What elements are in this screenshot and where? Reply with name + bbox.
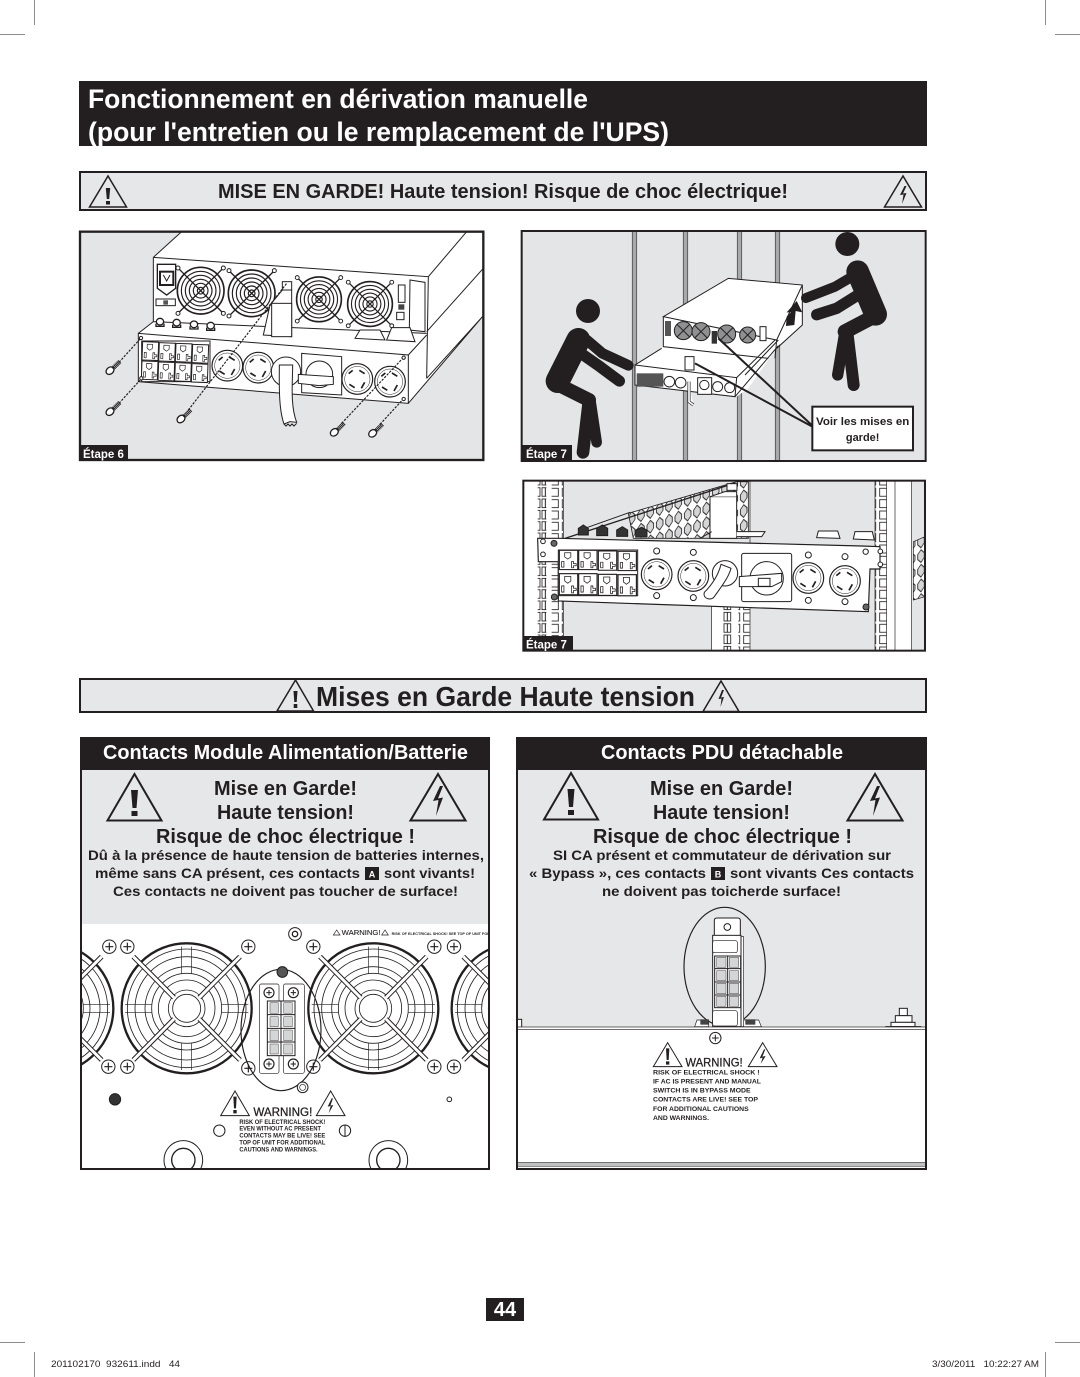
label: Étape 7 second xyxy=(523,636,573,652)
panel: Étape 7 PDU in rack xyxy=(523,481,925,651)
page number: 44 xyxy=(494,1299,517,1321)
warning label: WARNING! xyxy=(253,1105,312,1119)
knobs xyxy=(578,525,647,537)
warning text: MISE EN GARDE! Haute tension! Risque de choc électrique! xyxy=(218,181,788,203)
receptacles xyxy=(141,341,210,383)
receptacles xyxy=(558,550,638,596)
warning heading: Haute tension! xyxy=(217,802,354,824)
UPS unit xyxy=(635,278,802,405)
cable xyxy=(704,561,738,599)
warning body text xyxy=(529,847,914,899)
mounting holes xyxy=(109,928,452,1179)
warning body text: sont vivants! xyxy=(384,865,475,881)
callout box: Voir les mises en xyxy=(816,416,910,428)
icon: lightning triangle xyxy=(703,681,739,712)
warning label: WARNING! xyxy=(685,1056,743,1070)
warning label: RISK OF ELECTRICAL SHOCK ! xyxy=(653,1070,760,1076)
header bar: Contacts PDU détachable xyxy=(601,742,843,764)
warning heading: Mise en Garde! xyxy=(650,778,793,800)
connectors and card xyxy=(355,280,425,342)
left person xyxy=(558,299,628,452)
twist-lock outlets xyxy=(641,548,860,605)
rear grille xyxy=(565,482,925,600)
callout box: garde! xyxy=(846,432,879,444)
rack rails xyxy=(538,481,912,651)
warning body text: même sans CA présent, ces contacts xyxy=(95,865,360,881)
warning label: SWITCH IS IN BYPASS MODE xyxy=(653,1089,751,1095)
heading text: Mises en Garde Haute tension xyxy=(316,681,695,712)
warning body text: Dû à la présence de haute tension de batteries internes, xyxy=(88,847,484,863)
warning label: TOP OF UNIT FOR ADDITIONAL xyxy=(239,1140,326,1146)
fans xyxy=(0,943,582,1073)
footer: file name: 201102170 932611.indd 44 xyxy=(51,1359,180,1370)
icon: power inlet xyxy=(156,264,176,306)
title banner: (pour l'entretien ou le remplacement de l'UPS) xyxy=(88,117,669,147)
circled contact block xyxy=(684,907,765,1027)
top warning strip xyxy=(332,930,488,936)
warning body text: Ces contacts ne doivent pas toucher de surface! xyxy=(113,883,458,899)
callout arrows xyxy=(695,338,812,427)
title banner: Fonctionnement en dérivation manuelle xyxy=(88,84,588,114)
warning label: FOR ADDITIONAL CAUTIONS xyxy=(653,1107,749,1113)
warning body text: sont vivants Ces contacts xyxy=(730,865,914,881)
warning body text: B xyxy=(715,870,722,880)
diagram: PDU contacts and warning label xyxy=(517,907,925,1166)
warning label: AND WARNINGS. xyxy=(653,1116,709,1122)
warning heading: Risque de choc électrique ! xyxy=(593,826,852,848)
callout box xyxy=(812,407,913,450)
warning body text: « Bypass », ces contacts xyxy=(529,865,706,881)
footer: date: 3/30/2011 10:22:27 AM xyxy=(932,1359,1039,1370)
panel: Contacts PDU détachable xyxy=(516,737,927,1169)
warning label: CONTACTS ARE LIVE! SEE TOP xyxy=(653,1098,758,1104)
header bar: Contacts Module Alimentation/Batterie xyxy=(103,742,468,764)
fans xyxy=(176,266,394,328)
icon: exclamation triangle xyxy=(277,680,314,711)
warning label: EVEN WITHOUT AC PRESENT xyxy=(239,1126,321,1132)
top warning strip: WARNING! xyxy=(342,928,381,937)
twist-lock outlets xyxy=(212,350,405,397)
top warning strip: RISK OF ELECTRICAL SHOCK! SEE TOP OF UNIT FOR xyxy=(392,932,490,936)
section heading: Mises en Garde Haute tension xyxy=(80,679,926,712)
icon: exclamation triangle xyxy=(90,176,126,207)
warning bar xyxy=(80,172,926,210)
warning body text: ne doivent pas toicherde surface! xyxy=(602,883,841,899)
label: Étape 7: Étape 7 xyxy=(526,448,567,461)
label: Étape 6 xyxy=(80,445,128,461)
warning heading xyxy=(593,778,852,848)
page number xyxy=(486,1298,524,1321)
flaps xyxy=(817,531,874,540)
bypass switch xyxy=(739,553,792,602)
warning label: CAUTIONS AND WARNINGS. xyxy=(239,1147,318,1153)
knobs xyxy=(156,318,215,330)
screw xyxy=(710,1032,721,1044)
header bar xyxy=(516,737,927,769)
circled contact block xyxy=(241,967,321,1093)
warning label xyxy=(653,1043,777,1122)
screws xyxy=(105,283,405,439)
label: Étape 6: Étape 6 xyxy=(83,448,124,461)
icon: lightning triangle xyxy=(884,176,922,207)
diagram: rear panel with fans and contacts xyxy=(82,927,488,1168)
bracket xyxy=(263,282,292,337)
rack rails xyxy=(632,231,780,461)
icon: lightning triangle xyxy=(410,774,466,820)
PDU faceplate xyxy=(538,538,883,612)
warning heading: Risque de choc électrique ! xyxy=(156,826,415,848)
icon: lightning triangle xyxy=(848,774,902,820)
header bar xyxy=(80,737,490,769)
icon: exclamation triangle xyxy=(108,774,162,820)
warning label: IF AC IS PRESENT AND MANUAL xyxy=(653,1080,761,1086)
panel: Étape 7 two people lifting UPS xyxy=(522,231,926,461)
icon: exclamation triangle xyxy=(544,773,598,820)
right person xyxy=(806,232,877,385)
warning label xyxy=(221,1091,345,1153)
warning label: RISK OF ELECTRICAL SHOCK! xyxy=(239,1120,325,1126)
title banner xyxy=(79,81,927,147)
warning label: CONTACTS MAY BE LIVE! SEE xyxy=(239,1134,325,1140)
panel: Étape 6 rear of UPS with screws xyxy=(80,232,483,460)
warning body text xyxy=(88,847,484,899)
bypass switch xyxy=(298,353,342,395)
bolt xyxy=(885,1008,921,1027)
label: Étape 7 xyxy=(522,445,572,461)
panel: Contacts Module Alimentation/Batterie xyxy=(80,737,490,1170)
bracket xyxy=(700,484,765,538)
warning body text: A xyxy=(369,870,376,880)
warning body text: SI CA présent et commutateur de dérivation sur xyxy=(553,847,892,863)
warning heading: Mise en Garde! xyxy=(214,778,357,800)
warning heading xyxy=(156,778,415,848)
warning heading: Haute tension! xyxy=(653,802,790,824)
label: Étape 7 second: Étape 7 xyxy=(526,638,567,652)
cable xyxy=(271,357,301,426)
fan screws xyxy=(102,940,461,1075)
